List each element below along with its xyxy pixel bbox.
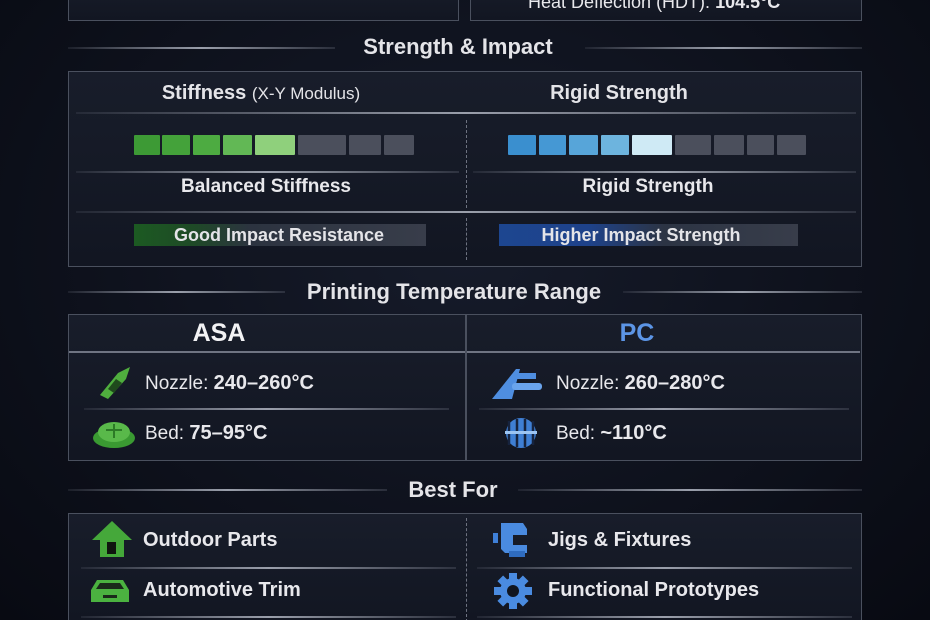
header: ASA: ASA <box>193 319 245 347</box>
icon: ASA bed <box>93 422 135 448</box>
text: rigid strength: Rigid Strength <box>583 176 713 197</box>
text: outdoor parts: Outdoor Parts <box>143 529 277 551</box>
heading: strength & impact: Strength & Impact <box>363 34 553 59</box>
bar: higher impact: Higher Impact Strength <box>541 225 741 245</box>
heading: best for: Best For <box>408 477 498 502</box>
text: PC nozzle: Nozzle: 260–280°C <box>556 372 725 394</box>
header: stiffness: Stiffness (X-Y Modulus) <box>162 82 360 104</box>
text: functional prototypes: Functional Prototypes <box>548 579 759 601</box>
icon: ASA nozzle <box>100 367 130 399</box>
text: jigs & fixtures: Jigs & Fixtures <box>548 529 691 551</box>
icon: gear <box>494 573 532 609</box>
panel: best for <box>68 513 862 620</box>
icon: PC nozzle <box>492 369 542 399</box>
panel: strength & impact <box>68 71 862 267</box>
bar: higher impact <box>499 224 798 246</box>
bar: good impact: Good Impact Resistance <box>174 225 384 245</box>
bar: good impact <box>134 224 426 246</box>
bar: stiffness <box>134 135 414 155</box>
text: automotive trim: Automotive Trim <box>143 579 301 601</box>
icon: PC bed <box>505 418 537 448</box>
text: ASA bed: Bed: 75–95°C <box>145 422 267 444</box>
heading: printing temperature range: Printing Temperature Range <box>307 279 601 304</box>
icon: car <box>91 580 129 602</box>
panel: temperature <box>68 314 862 461</box>
top partial panels <box>68 0 862 21</box>
text: PC bed: Bed: ~110°C <box>556 422 667 444</box>
icon: house <box>92 521 132 557</box>
icon: jigs <box>493 523 527 557</box>
text: ASA nozzle: Nozzle: 240–260°C <box>145 372 314 394</box>
text: balanced stiffness: Balanced Stiffness <box>181 176 351 197</box>
bar: rigid strength <box>508 135 806 155</box>
header: PC: PC <box>620 319 654 347</box>
header: rigid strength: Rigid Strength <box>550 82 688 104</box>
